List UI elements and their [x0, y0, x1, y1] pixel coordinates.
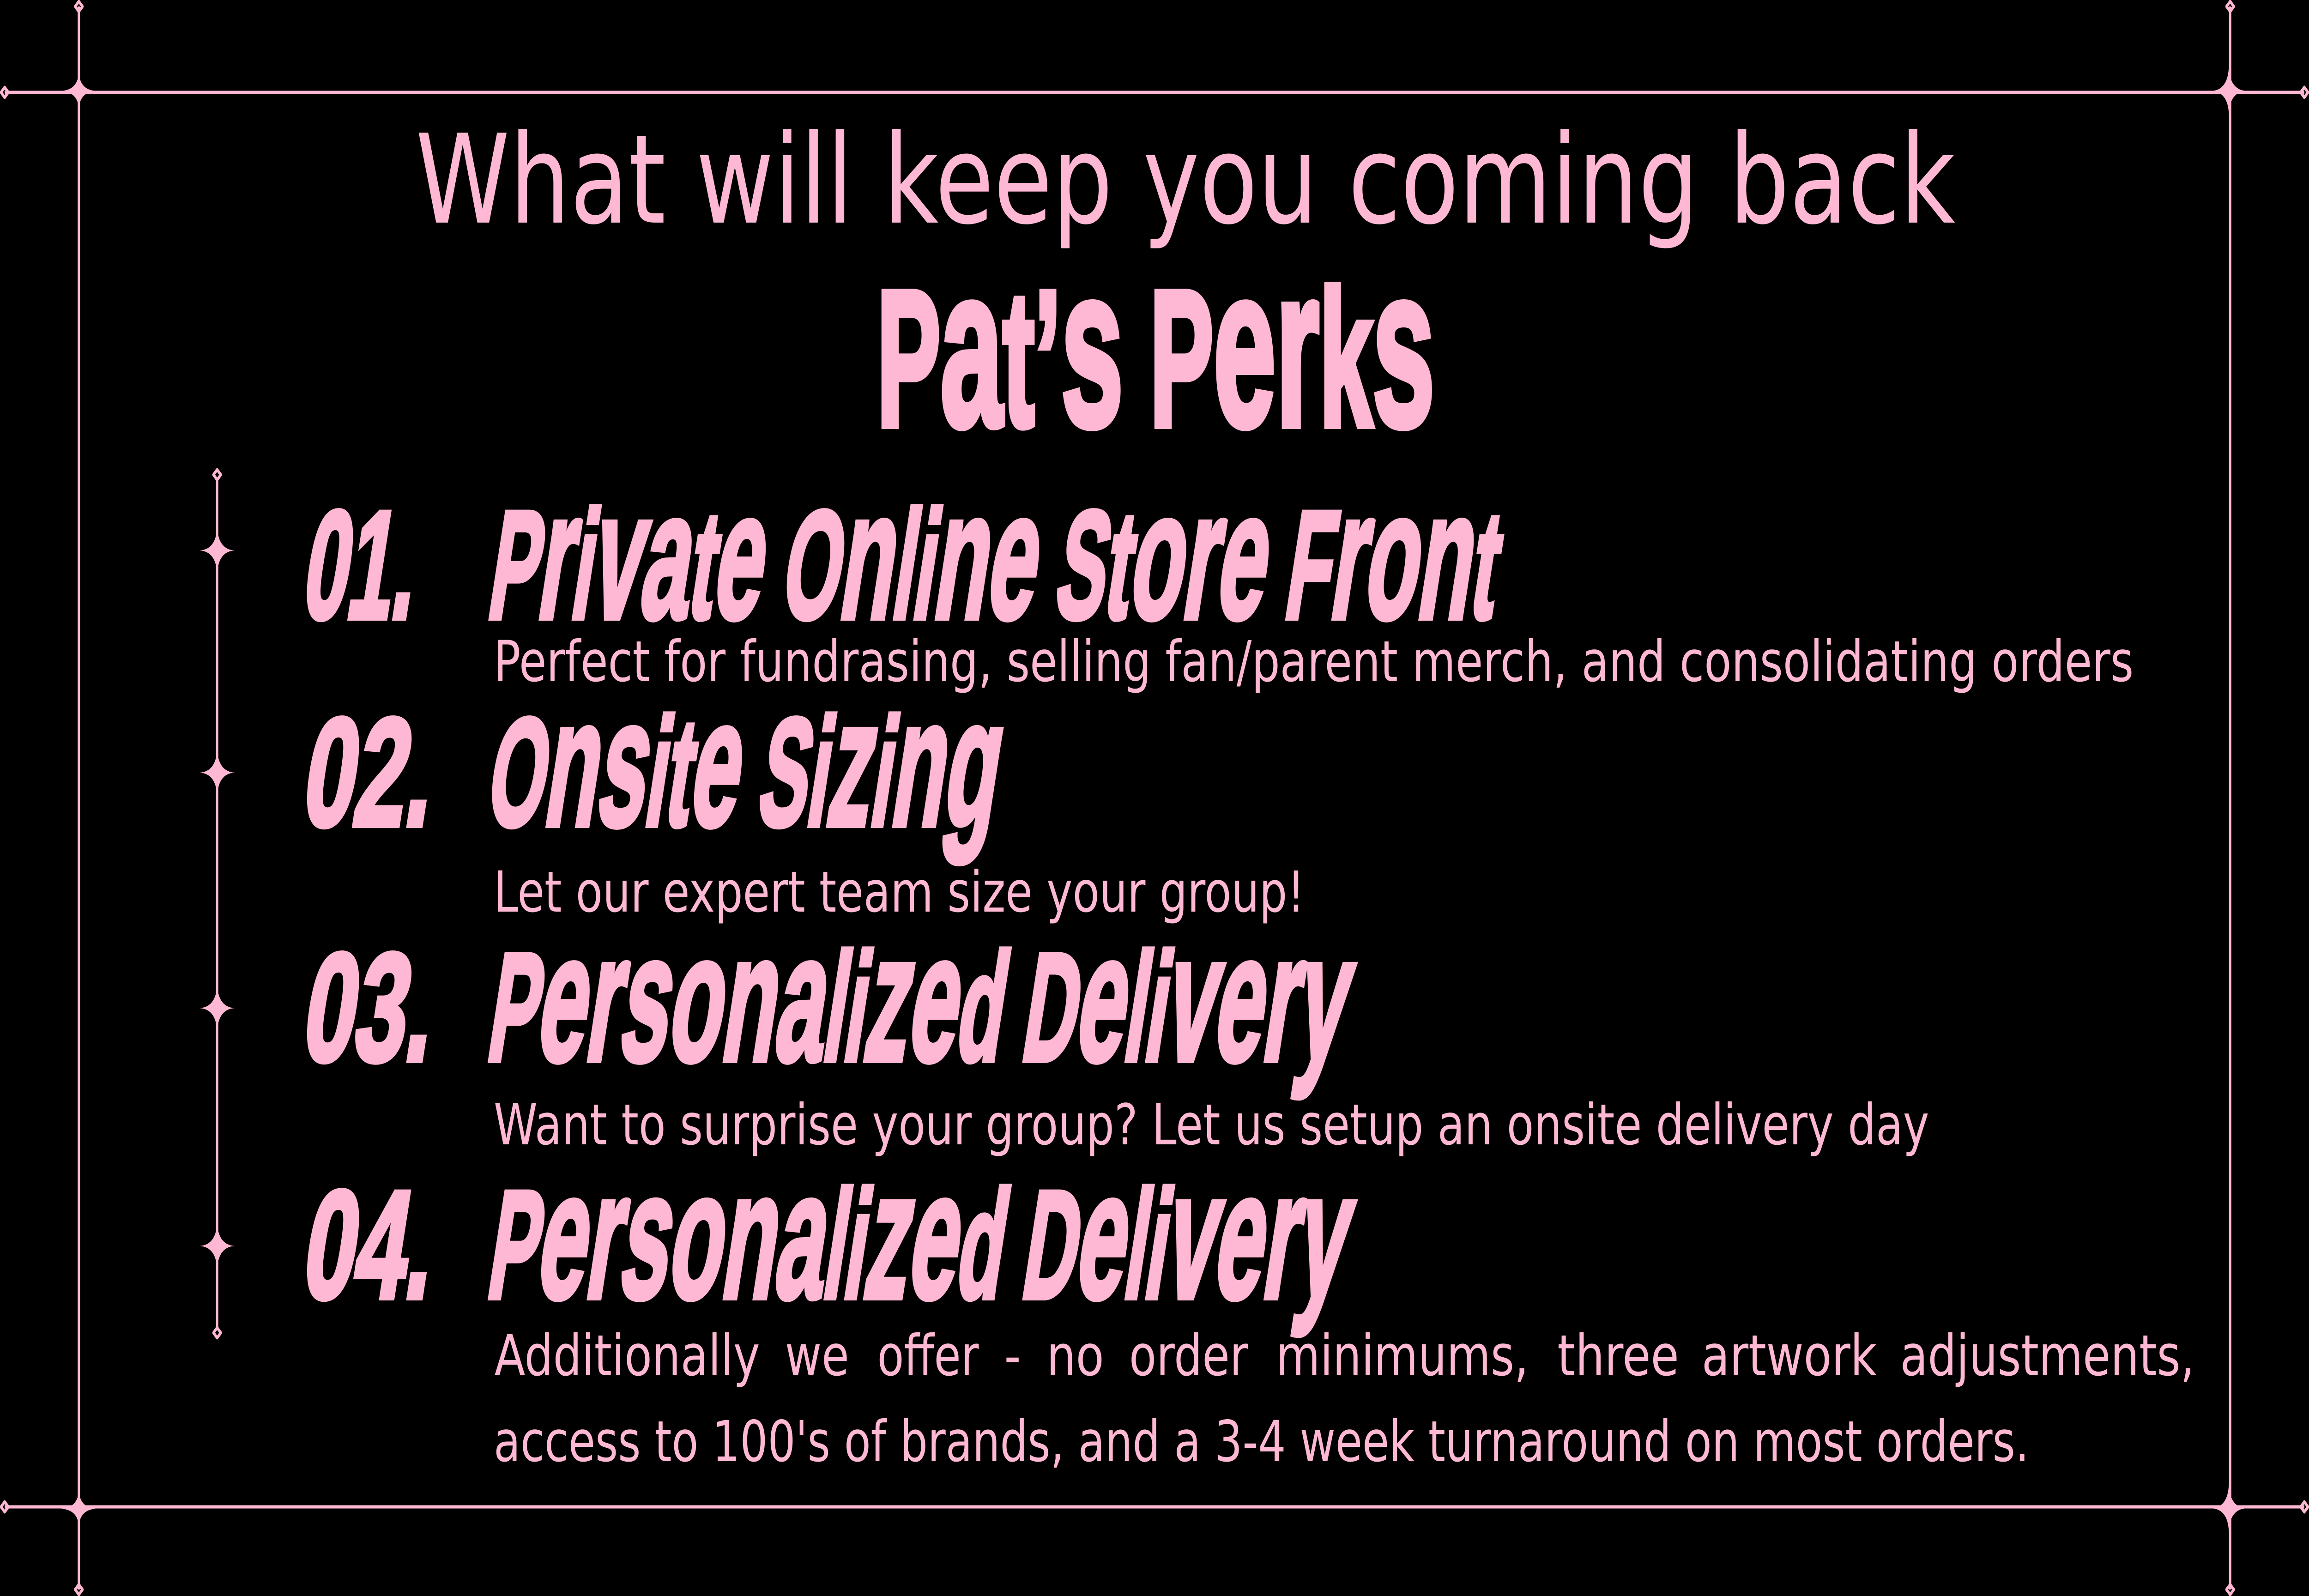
- perk 2 description: Let our expert team size your group!: [494, 860, 1305, 925]
- perk 4 description: -: [1004, 1324, 1021, 1389]
- perk 2: [294, 662, 1305, 925]
- perk 4 description: artwork: [1702, 1324, 1877, 1389]
- heading: Pat's Perks: Pat’s Perks: [877, 219, 1435, 473]
- perk 4 description: access to 100's of brands, and a 3-4 week turnaround on most orders.: [494, 1409, 2029, 1475]
- perk 1 description: Perfect for fundrasing, selling fan/parent merch, and consolidating orders: [494, 629, 2134, 695]
- perk 4 description: order: [1129, 1324, 1248, 1389]
- perk 4 heading: Personalized Delivery: [478, 1134, 1367, 1337]
- perk 3 heading: Personalized Delivery: [478, 897, 1367, 1100]
- perk 1 heading: Private Online Store Front: [479, 454, 1517, 657]
- perk 4 description: no: [1046, 1324, 1104, 1389]
- number 04: 04.: [294, 1159, 449, 1330]
- perk 2 heading: Onsite Sizing: [478, 662, 1018, 865]
- timeline with four stars: [199, 470, 235, 1338]
- perk 4 description: minimums,: [1276, 1324, 1529, 1389]
- perk 3 description: Want to surprise your group? Let us setup an onsite delivery day: [494, 1093, 1929, 1158]
- perk 4 description: offer: [877, 1324, 979, 1389]
- number 03: 03.: [294, 922, 449, 1093]
- perk 4 description: [494, 1324, 2195, 1475]
- title: what will keep you coming back: What will keep you coming back: [416, 108, 1955, 252]
- number 02: 02.: [294, 687, 449, 858]
- number 01: 01.: [295, 479, 432, 650]
- perk 4 description: adjustments,: [1900, 1324, 2195, 1389]
- perk 4 description: we: [785, 1324, 849, 1389]
- perk 4: [294, 1134, 2195, 1475]
- perk 4 description: three: [1557, 1324, 1679, 1389]
- perk 3: [294, 897, 1929, 1158]
- perk 4 description: Additionally: [495, 1324, 760, 1389]
- perk 1: [295, 454, 2134, 695]
